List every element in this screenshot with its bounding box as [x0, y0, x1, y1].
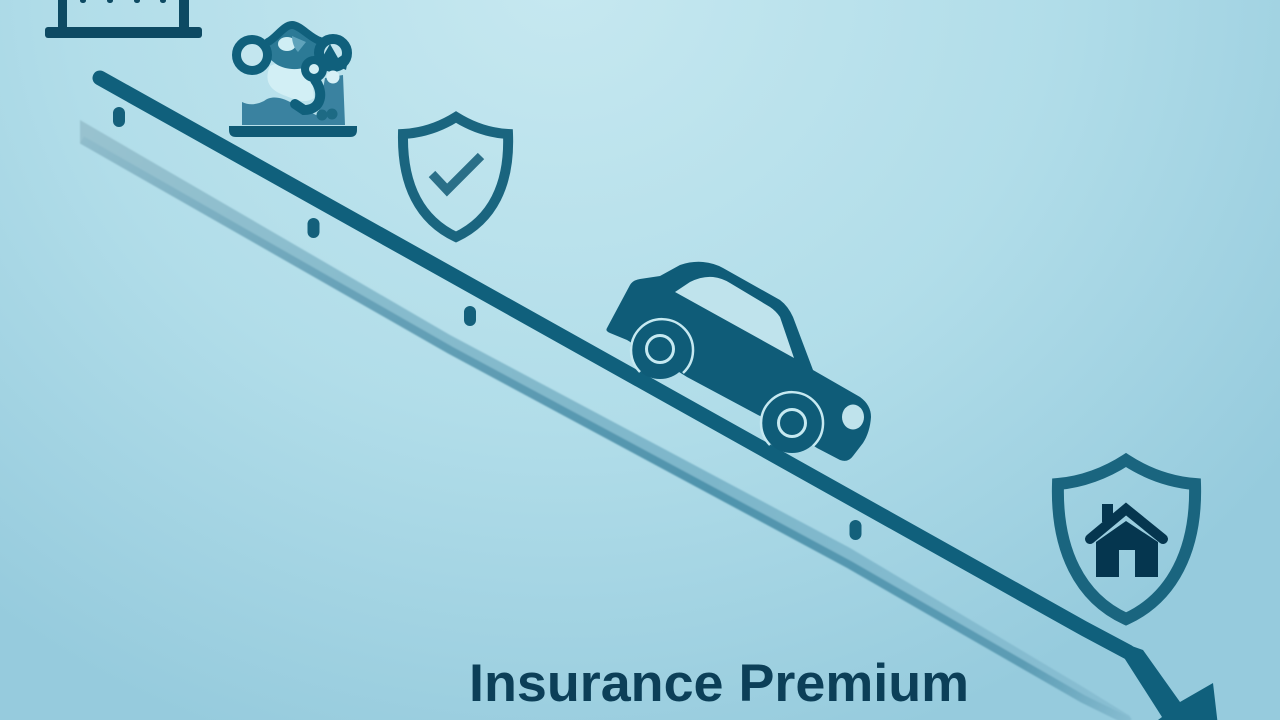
car headlight — [842, 404, 864, 430]
icon: shield with house — [1058, 460, 1195, 619]
icon: document stand top left — [45, 0, 202, 38]
icon: shield with check mark — [403, 117, 508, 237]
title: Insurance Premium — [469, 654, 969, 713]
car window — [675, 277, 794, 358]
shadow band below the slope — [80, 120, 1130, 720]
car front wheel — [761, 392, 823, 453]
icon: abstract medical and savings symbol — [229, 24, 357, 137]
house — [1090, 504, 1163, 577]
slope tick marks — [113, 107, 862, 540]
downward arrow line — [100, 78, 1218, 720]
car rear wheel — [630, 319, 693, 379]
icon: car descending the slope — [606, 262, 871, 461]
